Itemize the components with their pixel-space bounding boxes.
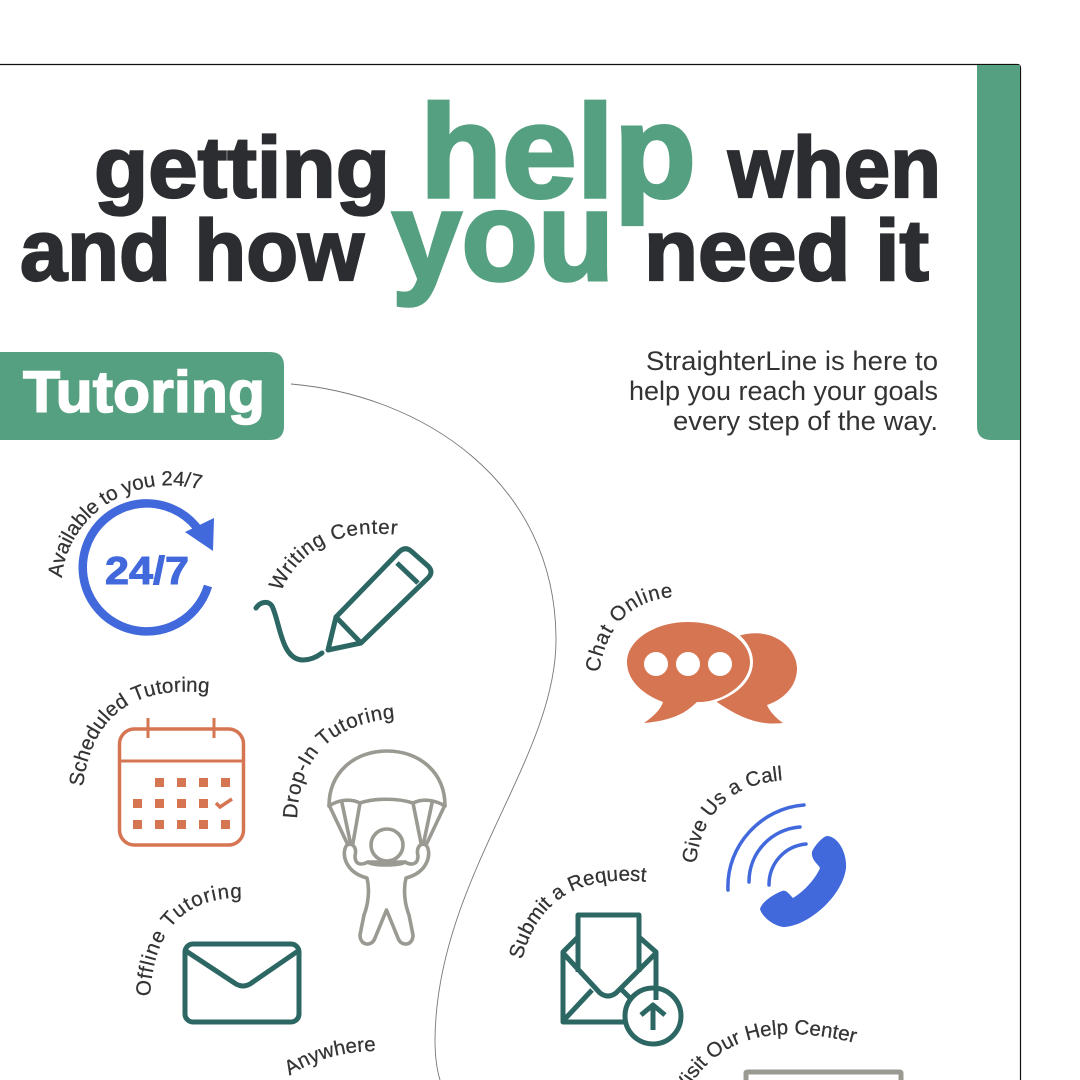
item: chat online: Chat Online xyxy=(586,586,672,671)
intro text: every step of the way. xyxy=(673,406,938,436)
item: anywhere: Anywhere xyxy=(287,1040,375,1076)
item: available 24/7 xyxy=(48,471,214,636)
item: scheduled tutoring: Scheduled Tutoring xyxy=(70,676,209,786)
title: help xyxy=(420,78,696,225)
title: getting xyxy=(94,120,390,216)
item: drop-in tutoring: Drop-In Tutoring xyxy=(282,708,394,818)
heading: Tutoring xyxy=(0,352,284,440)
item: offline tutoring: Offline Tutoring xyxy=(136,886,241,996)
heading: Tutoring: Tutoring xyxy=(23,360,265,425)
title: when xyxy=(727,120,941,216)
title: need it xyxy=(644,203,929,299)
item: submit a request: Submit a Request xyxy=(510,868,647,958)
intro text xyxy=(629,346,938,436)
title: you xyxy=(392,166,614,307)
item: available 24/7: Available to you 24/7 xyxy=(48,471,203,578)
item: chat online xyxy=(586,586,797,724)
item: writing center xyxy=(254,520,434,662)
item: writing center: Writing Center xyxy=(268,520,398,588)
item: give us a call: Give Us a Call xyxy=(682,765,782,862)
item: scheduled tutoring xyxy=(70,676,246,847)
title: and how xyxy=(20,203,365,299)
curved divider xyxy=(291,384,556,1080)
title xyxy=(20,78,941,307)
item: drop-in tutoring xyxy=(282,708,447,946)
item: submit a request xyxy=(510,868,684,1046)
item: give us a call xyxy=(682,765,846,927)
item: available 24/7: 24/7 xyxy=(105,550,189,593)
green side tab xyxy=(977,65,1020,440)
intro text: help you reach your goals xyxy=(629,376,938,406)
intro text: StraighterLine is here to xyxy=(646,346,938,376)
item: offline tutoring xyxy=(136,886,302,1024)
